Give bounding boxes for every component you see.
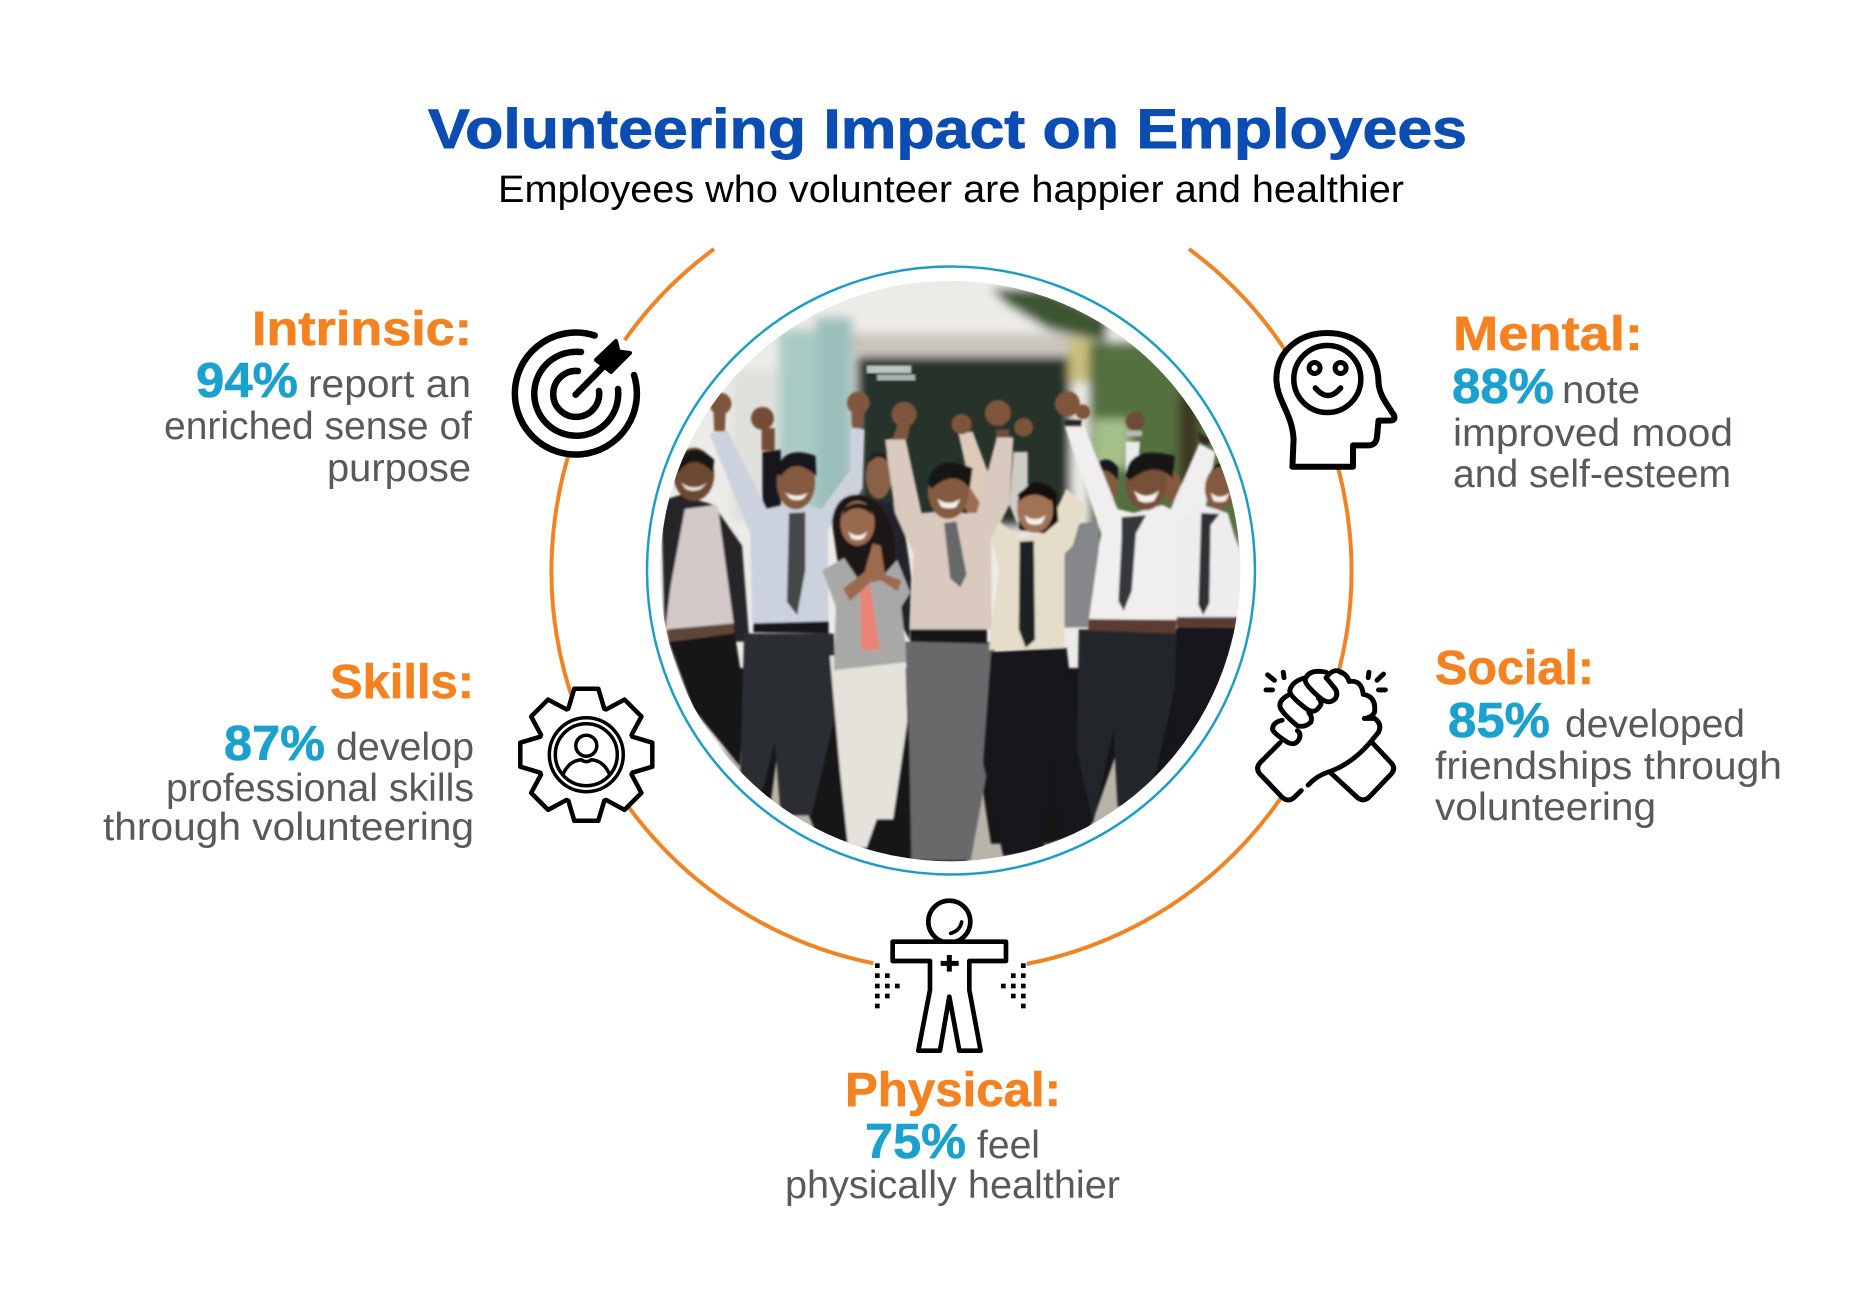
text block: social: 85% — [1448, 694, 1550, 748]
text block: mental: 88% — [1452, 360, 1554, 414]
person D — [905, 642, 995, 860]
person G — [1169, 627, 1237, 762]
icon: target with arrow — [512, 330, 640, 458]
person E — [982, 646, 1070, 856]
text block: physical: physically healthier — [785, 1164, 1120, 1207]
text block: intrinsic: purpose — [327, 447, 471, 490]
icon: handshake — [1257, 668, 1397, 802]
orange ring — [551, 249, 1351, 971]
text block: mental: note — [1562, 369, 1640, 412]
text block: social: Social: — [1435, 642, 1594, 695]
text block: social: friendships through — [1435, 745, 1782, 788]
back people — [866, 454, 892, 499]
subtitle: Employees who volunteer are happier and healthier — [498, 169, 1404, 211]
text block: skills: 87% — [224, 717, 325, 771]
person B — [740, 633, 837, 815]
text block: physical: feel — [977, 1124, 1040, 1167]
teal ring around photo — [647, 266, 1255, 874]
text block: skills: professional skills — [166, 767, 474, 810]
text block: physical: Physical: — [845, 1064, 1061, 1117]
text block: skills: Skills: — [330, 656, 474, 709]
text block: social: volunteering — [1435, 786, 1656, 829]
text block: skills — [103, 656, 474, 849]
text block: intrinsic: 94% — [196, 354, 298, 408]
text block: skills: through volunteering — [103, 806, 474, 849]
icon: head with smile — [1276, 333, 1394, 467]
photo: group of cheering employees — [660, 281, 1240, 862]
text block: intrinsic: enriched sense of — [164, 405, 472, 448]
text block: physical — [785, 1064, 1120, 1207]
text block: intrinsic: report an — [308, 363, 471, 406]
person A — [661, 495, 749, 642]
text block: mental: and self-esteem — [1453, 453, 1731, 496]
person F — [1077, 629, 1179, 823]
text block: physical: 75% — [865, 1115, 966, 1169]
text block: intrinsic — [164, 303, 472, 490]
person C — [830, 493, 895, 579]
text block: mental — [1452, 308, 1733, 496]
text block: skills: develop — [336, 726, 474, 769]
text block: social: developed — [1565, 703, 1745, 746]
text block: intrinsic: Intrinsic: — [252, 303, 472, 356]
text block: mental: improved mood — [1453, 412, 1733, 455]
dark back legs — [738, 668, 1183, 864]
text block: social — [1435, 642, 1782, 829]
icon: gear with person — [520, 689, 652, 821]
title: Volunteering Impact on Employees — [428, 97, 1467, 160]
text block: mental: Mental: — [1453, 308, 1643, 361]
icon: human body with plus — [873, 893, 1027, 1057]
